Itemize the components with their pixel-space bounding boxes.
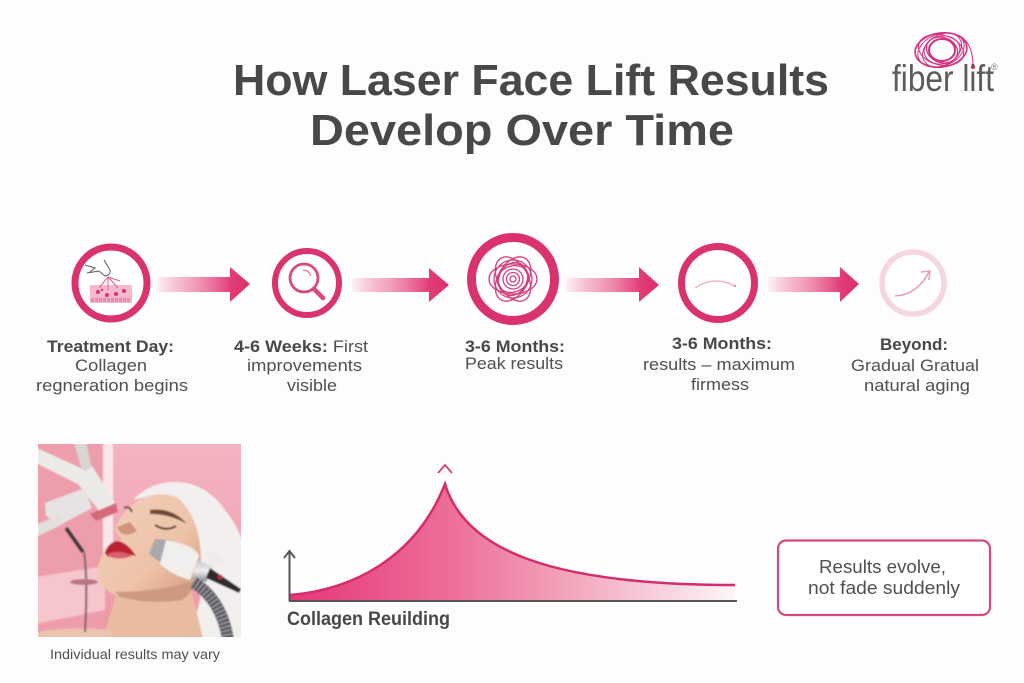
area under curve bbox=[290, 484, 735, 600]
step 2: 4-6 weeks bbox=[234, 251, 368, 395]
arrow 4 bbox=[768, 267, 859, 302]
face bbox=[97, 494, 201, 602]
step 5: beyond bbox=[851, 252, 979, 395]
label: treatment day: Treatment Day: bbox=[47, 337, 174, 356]
curve line bbox=[290, 484, 735, 595]
arrow 3 bbox=[566, 267, 659, 302]
arrow 1 bbox=[157, 267, 250, 302]
icon: collagen rose bbox=[472, 238, 554, 320]
callout: results evolve: not fade suddenly bbox=[808, 578, 960, 598]
callout: results evolve bbox=[778, 540, 990, 615]
logo: fiber lift: fiber lift bbox=[892, 58, 995, 99]
icon: laser on skin bbox=[75, 247, 147, 319]
title bbox=[233, 56, 829, 155]
chart label: Collagen Reuilding bbox=[287, 609, 450, 630]
label: treatment day: regneration begins bbox=[36, 376, 188, 395]
label: treatment day bbox=[36, 337, 188, 395]
axes bbox=[284, 551, 737, 601]
photo: laser treatment on face bbox=[38, 444, 241, 637]
label: 4-6 weeks bbox=[234, 337, 368, 395]
label: beyond bbox=[851, 335, 979, 395]
nose shadow bbox=[117, 522, 137, 535]
step 3: peak results bbox=[465, 238, 565, 373]
label: beyond: Gradual Gratual bbox=[851, 356, 979, 375]
label: 4-6 weeks: visible bbox=[287, 376, 337, 395]
arrow 2 bbox=[352, 268, 449, 302]
icon: firm curve bbox=[682, 246, 754, 320]
label: maximum firmness: firmess bbox=[691, 375, 749, 394]
label: peak results bbox=[465, 337, 565, 373]
label: peak results: 3-6 Months: bbox=[465, 337, 565, 356]
title: How Laser Face Lift Results bbox=[233, 56, 829, 105]
neck and shoulder bbox=[105, 592, 204, 637]
logo: fiber lift: ® bbox=[991, 62, 998, 72]
icon: magnifying glass bbox=[275, 251, 339, 315]
jaw shadow bbox=[115, 582, 192, 602]
caption: individual results: Individual results may vary bbox=[50, 647, 220, 662]
lower laser device bbox=[149, 539, 241, 640]
title: Develop Over Time bbox=[310, 106, 734, 155]
label: 4-6 weeks: 4-6 Weeks: First bbox=[234, 337, 368, 356]
upper laser device bbox=[38, 444, 118, 633]
label: maximum firmness: results – maximum bbox=[643, 355, 795, 374]
step 1: treatment day bbox=[36, 247, 188, 395]
label: beyond: natural aging bbox=[864, 376, 970, 395]
label: treatment day: Collagen bbox=[75, 356, 147, 375]
callout: results evolve: Results evolve, bbox=[819, 557, 946, 577]
label: maximum firmness: 3-6 Months: bbox=[672, 334, 772, 353]
icon: gentle upward arrow bbox=[882, 252, 944, 314]
step 4: maximum firmness bbox=[643, 246, 795, 394]
towel bbox=[133, 482, 245, 646]
chart: collagen rebuilding curve bbox=[284, 465, 737, 630]
logo: fiber lift bbox=[892, 26, 998, 99]
label: maximum firmness bbox=[643, 334, 795, 394]
label: beyond: Beyond: bbox=[880, 335, 948, 354]
label: 4-6 weeks: improvements bbox=[247, 356, 362, 375]
label: peak results: Peak results bbox=[465, 354, 563, 373]
peak marker bbox=[438, 465, 452, 473]
lips bbox=[105, 541, 136, 557]
eyebrow and eye bbox=[150, 510, 187, 524]
